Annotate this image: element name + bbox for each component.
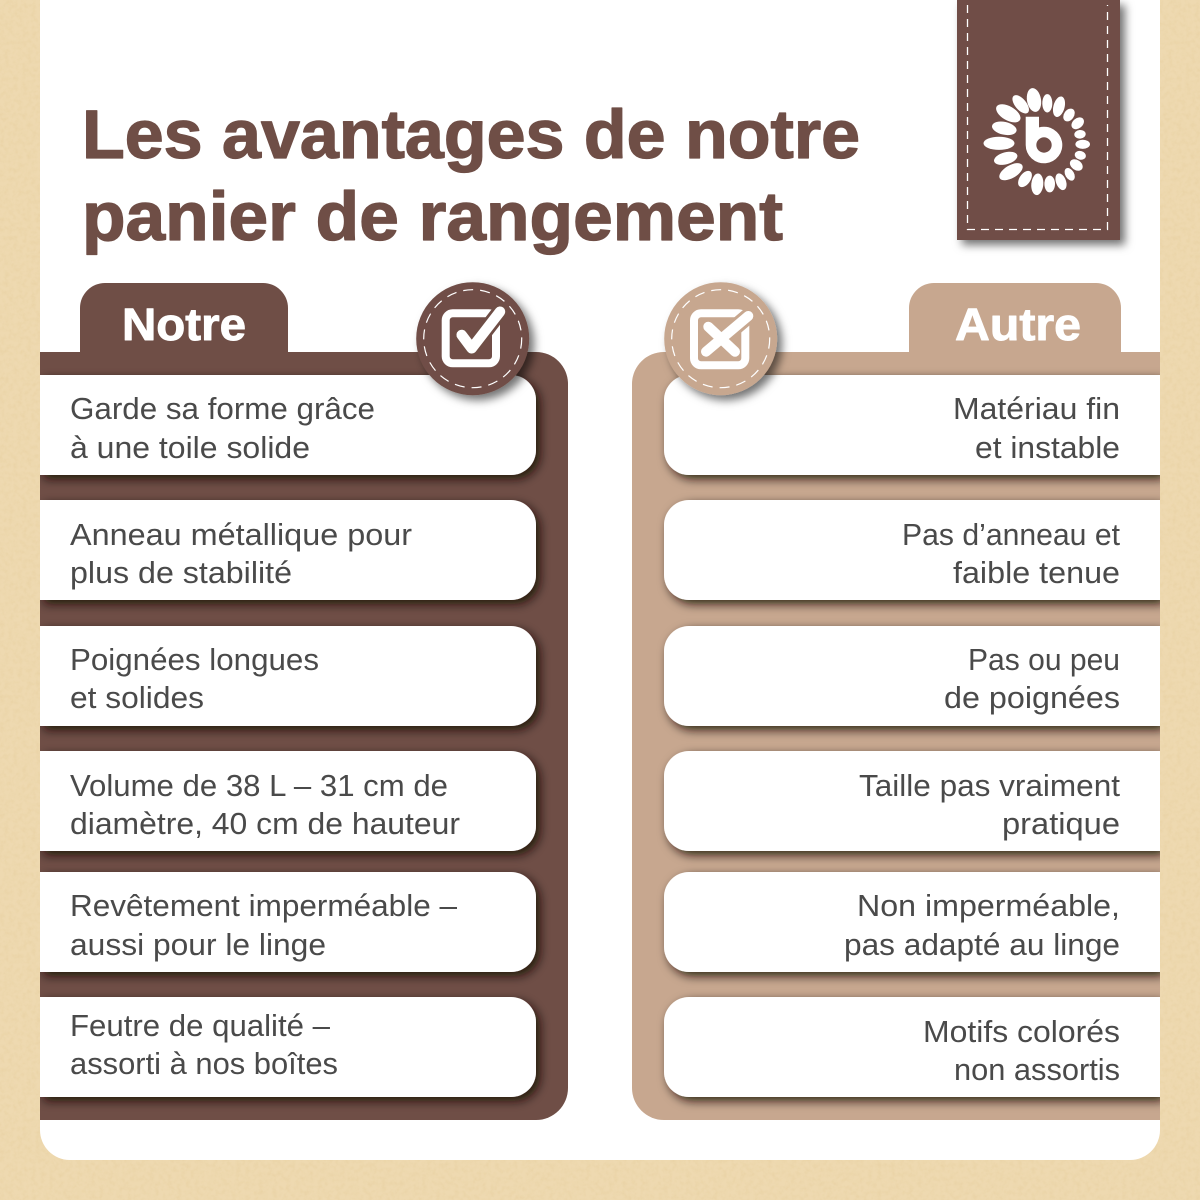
tab: Autre: Autre xyxy=(955,299,1081,350)
row 3: Pas ou peu xyxy=(968,642,1120,677)
title: Les avantages de notre xyxy=(82,96,860,173)
row 1: Garde sa forme grâce xyxy=(70,391,375,426)
title xyxy=(82,96,860,255)
row 4: Taille pas vraiment xyxy=(859,768,1120,803)
icon: check badge xyxy=(416,282,529,395)
panel: Autre xyxy=(632,282,1160,1120)
row 4: diamètre, 40 cm de hauteur xyxy=(70,806,460,841)
row 6: Feutre de qualité – xyxy=(70,1008,331,1043)
row 2: Pas d’anneau et xyxy=(902,517,1120,552)
row 2 xyxy=(40,500,536,600)
row 1: à une toile solide xyxy=(70,430,310,465)
row 6: non assortis xyxy=(954,1052,1120,1087)
row 2 xyxy=(664,500,1160,600)
row 5: pas adapté au linge xyxy=(844,927,1120,962)
row 3: et solides xyxy=(70,680,204,715)
row 5: Non imperméable, xyxy=(857,888,1120,923)
row 5 xyxy=(664,872,1160,972)
row 6 xyxy=(40,997,536,1097)
list of drawbacks xyxy=(664,375,1160,1097)
row 1: et instable xyxy=(975,430,1120,465)
row 1 xyxy=(664,375,1160,475)
row 5: aussi pour le linge xyxy=(70,927,326,962)
tab: Autre xyxy=(909,283,1121,353)
row 3: Poignées longues xyxy=(70,642,319,677)
row 3 xyxy=(664,626,1160,726)
row 3 xyxy=(40,626,536,726)
row 6: Motifs colorés xyxy=(923,1014,1120,1049)
panel background xyxy=(40,352,568,1120)
list of advantages xyxy=(40,375,536,1097)
title: panier de rangement xyxy=(82,178,783,255)
row 2: faible tenue xyxy=(953,555,1120,590)
bookmark logo tag xyxy=(957,0,1120,240)
row 5: Revêtement imperméable – xyxy=(70,888,458,923)
row 5 xyxy=(40,872,536,972)
row 4 xyxy=(664,751,1160,851)
row 6: assorti à nos boîtes xyxy=(70,1046,338,1081)
row 4 xyxy=(40,751,536,851)
row 1 xyxy=(40,375,536,475)
tab: Notre: Notre xyxy=(122,299,246,350)
row 6 xyxy=(664,997,1160,1097)
panel: Notre xyxy=(40,282,568,1120)
row 4: Volume de 38 L – 31 cm de xyxy=(70,768,448,803)
panel background xyxy=(632,352,1160,1120)
tab: Notre xyxy=(80,283,288,353)
row 3: de poignées xyxy=(944,680,1120,715)
icon: flower logo xyxy=(984,87,1090,196)
row 4: pratique xyxy=(1002,806,1120,841)
row 2: plus de stabilité xyxy=(70,555,292,590)
icon: cross badge xyxy=(664,282,777,395)
row 2: Anneau métallique pour xyxy=(70,517,412,552)
row 1: Matériau fin xyxy=(953,391,1120,426)
